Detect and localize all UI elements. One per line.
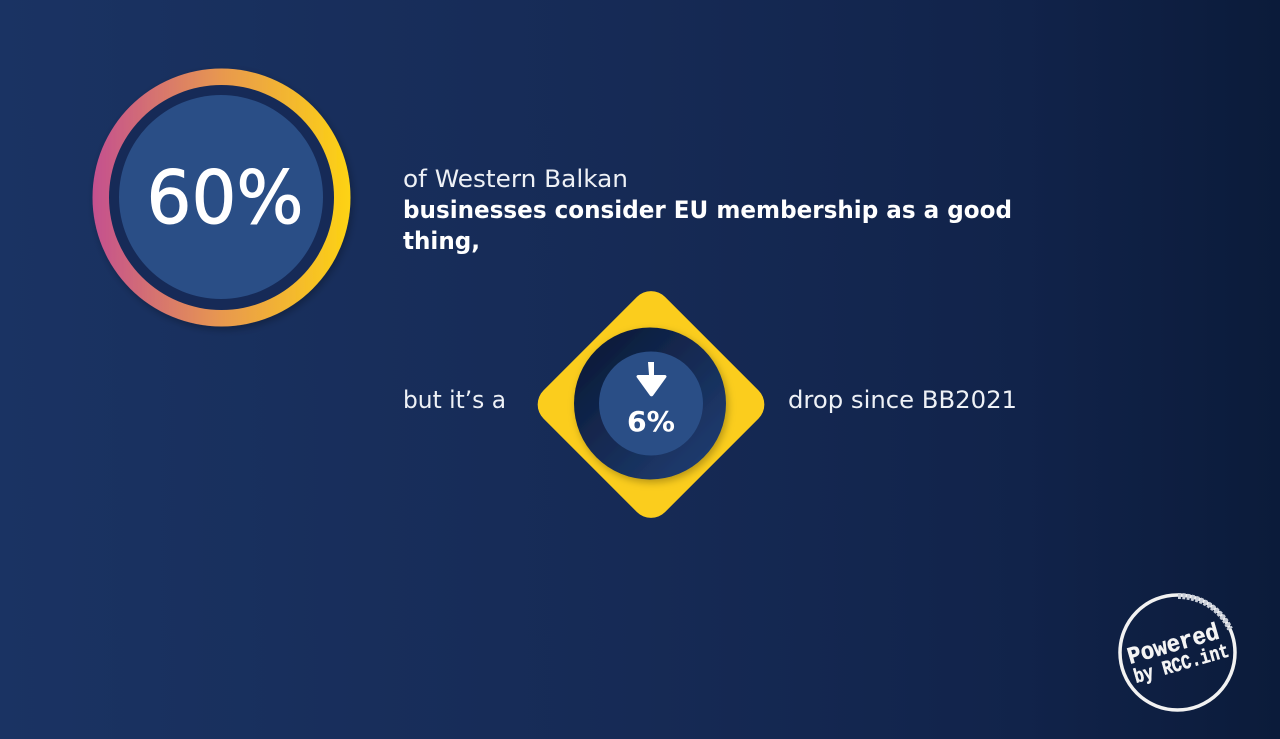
line: bold claim 2: thing, (403, 227, 480, 255)
stamp text: by RCC.int: by RCC.int (1132, 641, 1232, 690)
yellow rounded diamond (529, 283, 773, 526)
stamp text: Powered: Powered (1125, 620, 1223, 672)
text: drop since BB2021: drop since BB2021 (788, 386, 1017, 414)
stamp ring (1120, 595, 1235, 710)
value: 6%: 6% (627, 405, 675, 438)
text: but it's a: but it’s a (403, 386, 506, 414)
stamp ring rough edge (1178, 596, 1230, 629)
line: bold claim 1: businesses consider EU membership as a good (403, 196, 1012, 224)
diamond badge: 6% drop (529, 283, 773, 526)
blue disc (599, 352, 703, 456)
value: 60%: 60% (146, 156, 304, 241)
text block: intro statement (403, 165, 1012, 255)
percentage ring: 60% (92, 68, 350, 326)
stamp: Powered by RCC.int (1120, 595, 1235, 710)
blue disc (119, 95, 323, 299)
line: of Western Balkan: of Western Balkan (403, 165, 628, 193)
dark circle (574, 328, 726, 480)
inner dark circle (109, 85, 334, 310)
gradient ring (92, 68, 350, 326)
icon: down arrow (636, 362, 666, 396)
